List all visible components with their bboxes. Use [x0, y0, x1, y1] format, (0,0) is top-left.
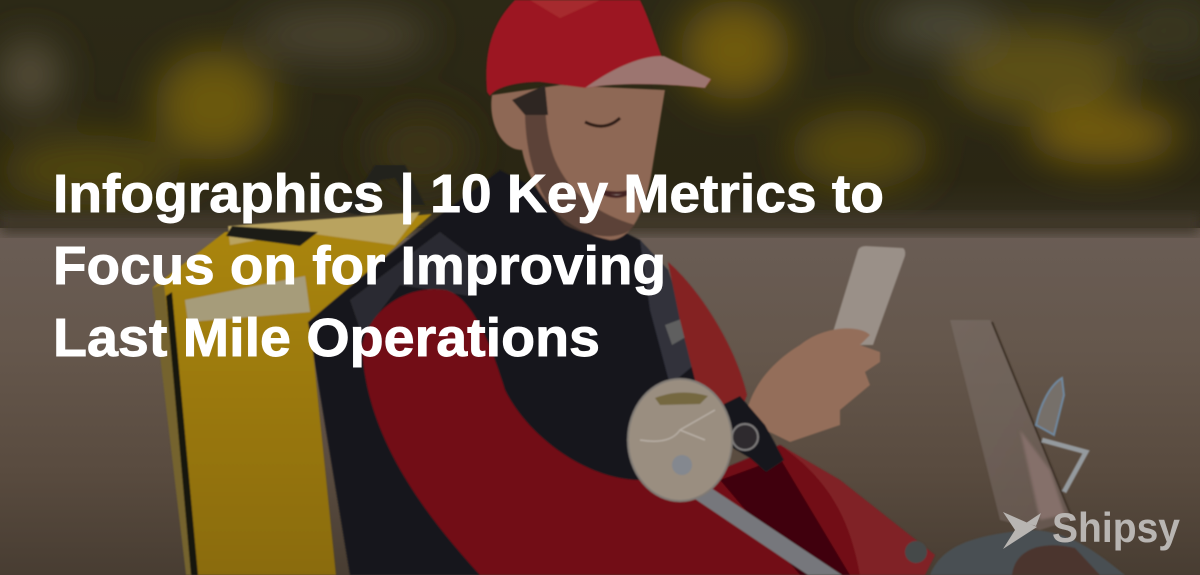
smartphone: [829, 246, 905, 345]
rider: red sleeves: [362, 262, 935, 575]
hand holding phone: [745, 246, 905, 442]
logo: Shipsy: Shipsy: [1052, 504, 1181, 551]
icon: logo arrow: [1003, 512, 1041, 549]
right mirror and handlebar: [1036, 378, 1086, 492]
background: ground: [0, 214, 1200, 575]
title: Last Mile Operations: [53, 308, 600, 368]
rider: torso and vest: [308, 170, 705, 575]
left mirror and stem: [628, 379, 927, 575]
rider: head and face: [491, 85, 665, 240]
rider: red cap: [486, 0, 711, 96]
title: Focus on for Improving: [53, 236, 666, 296]
logo: Shipsy: [1003, 504, 1181, 551]
title: [53, 164, 884, 368]
wristwatch: [724, 396, 784, 472]
scooter body: [930, 530, 1125, 575]
title: Infographics | 10 Key Metrics to: [53, 164, 884, 225]
windshield: [950, 320, 1072, 530]
backpack: [152, 165, 432, 575]
background: blurred trees: [0, 0, 1200, 240]
